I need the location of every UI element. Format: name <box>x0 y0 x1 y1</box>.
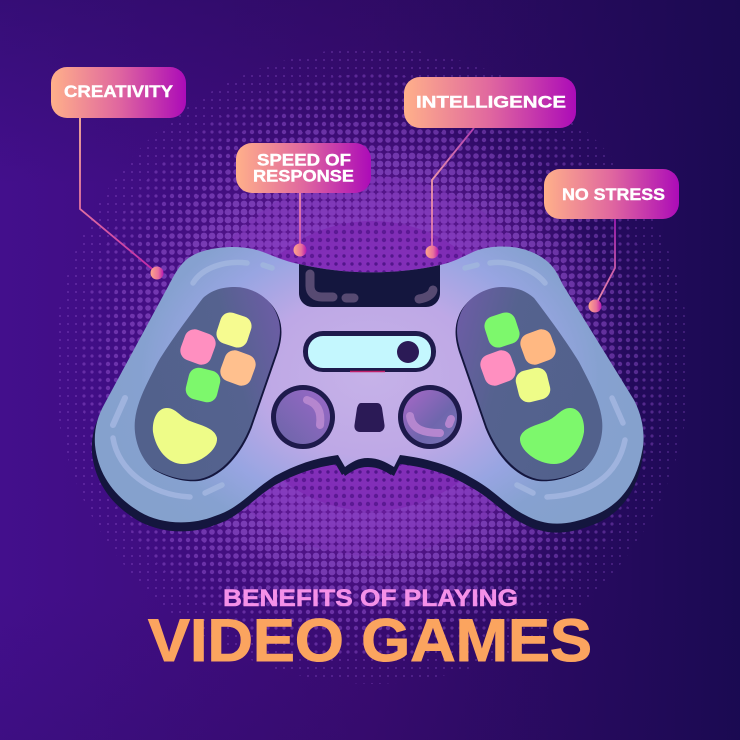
controller shadow <box>92 254 644 533</box>
callout: speed of response: RESPONSE <box>253 168 354 186</box>
halftone dot circle <box>54 48 690 684</box>
callout: speed of response <box>236 143 371 256</box>
callout: intelligence: INTELLIGENCE <box>416 94 566 112</box>
right trigger button <box>520 408 584 464</box>
left button pad <box>135 287 281 481</box>
shell highlights <box>113 262 625 497</box>
callout: no stress <box>544 169 679 312</box>
callout: creativity <box>51 67 186 280</box>
center button <box>354 403 385 432</box>
callout: intelligence <box>404 77 576 258</box>
callout: creativity: CREATIVITY <box>64 83 173 101</box>
top panel <box>299 264 440 307</box>
callout: no stress: NO STRESS <box>562 186 665 204</box>
right button pad <box>456 287 602 481</box>
subtitle: BENEFITS OF PLAYING <box>223 585 518 612</box>
right face buttons <box>477 310 559 404</box>
right analog stick <box>398 385 462 449</box>
main heading: VIDEO GAMES <box>148 607 592 674</box>
game controller <box>92 246 644 533</box>
screen slot <box>303 331 436 372</box>
controller body <box>95 246 644 524</box>
left trigger button <box>153 408 217 464</box>
title <box>148 585 592 674</box>
left face buttons <box>177 310 259 404</box>
callout: speed of response: SPEED OF <box>257 152 351 170</box>
left analog stick <box>271 385 335 449</box>
